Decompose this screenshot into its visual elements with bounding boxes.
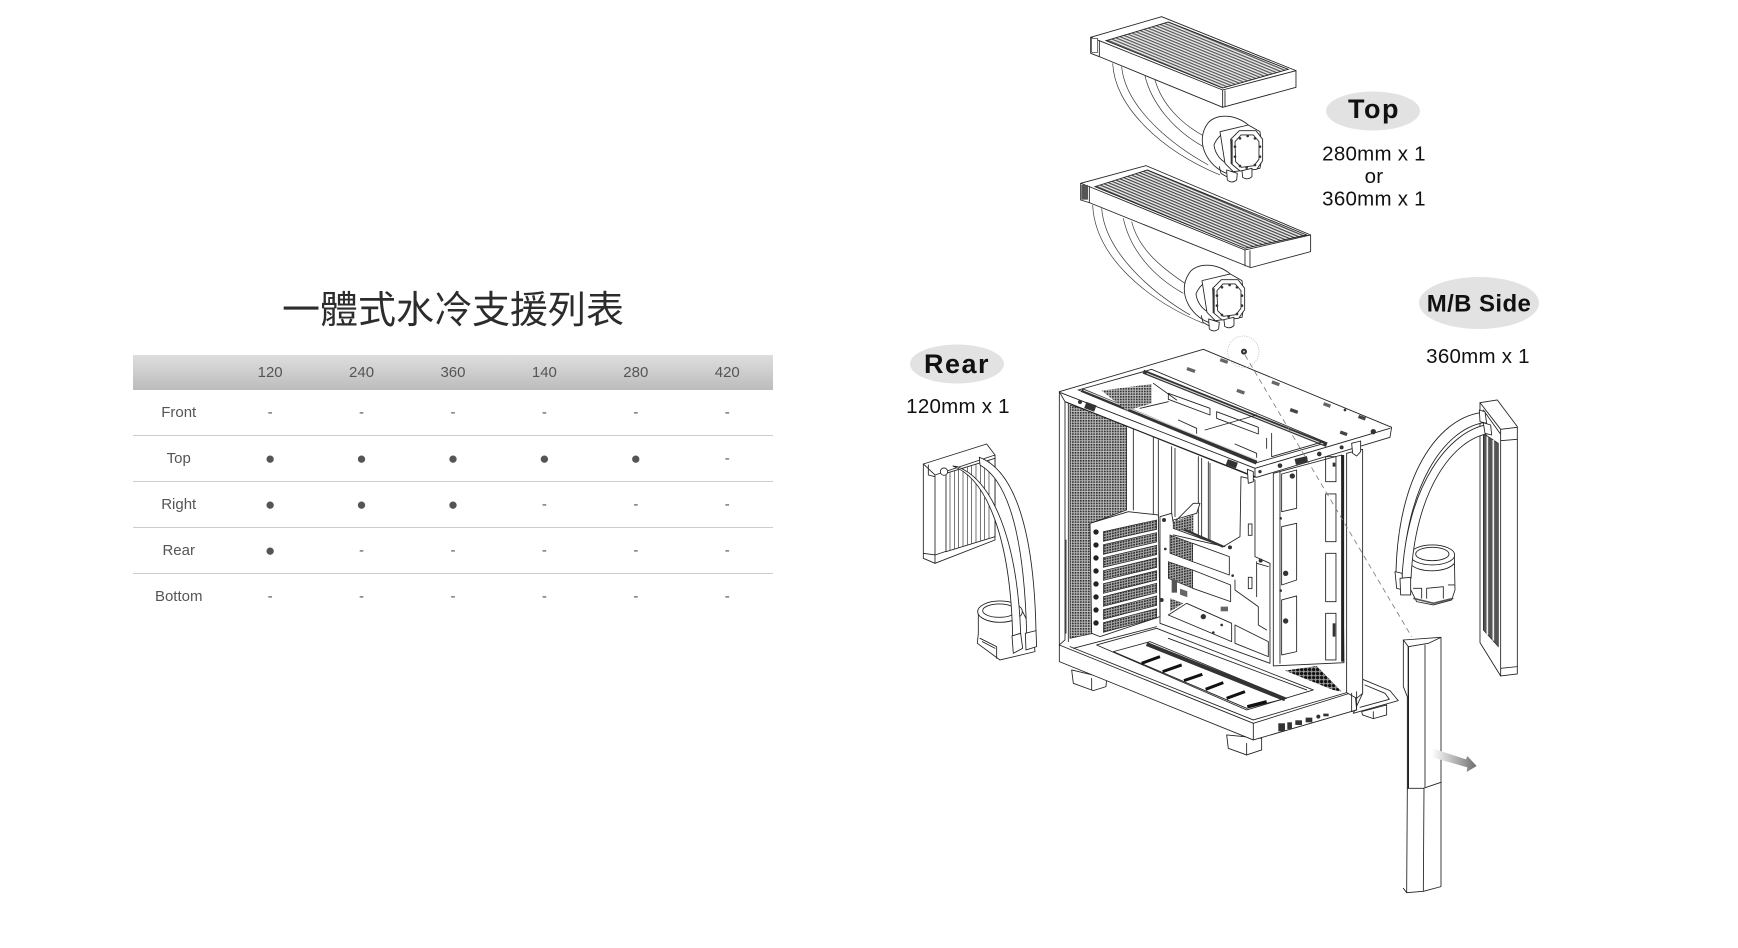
size: Rear: 120mm x 1: [906, 395, 1010, 418]
row: Right: ●: [265, 494, 275, 514]
heading: M/B Side: M/B Side: [1427, 290, 1531, 318]
table header row: 280: [623, 364, 648, 381]
table header row: [133, 355, 773, 390]
table header row: 140: [532, 364, 557, 381]
row: Rear: -: [450, 542, 455, 558]
right pillar: [1343, 449, 1363, 712]
case: [1059, 336, 1412, 755]
sizes: Top: 360mm x 1: [1322, 188, 1426, 210]
radiator M/B side: [1480, 400, 1517, 676]
row: Top: ●: [448, 448, 458, 468]
table header row: 240: [349, 364, 374, 381]
row: Rear: -: [633, 542, 638, 558]
row: Top: ●: [265, 448, 275, 468]
row: Top: -: [725, 450, 730, 466]
row: Front: -: [450, 404, 455, 421]
row: Top: [166, 448, 730, 468]
row: Bottom: -: [542, 588, 547, 605]
row: Rear: Rear: [162, 542, 195, 558]
table header row: 120: [258, 364, 283, 381]
row: Right: ●: [448, 494, 458, 514]
row: Top: ●: [539, 448, 550, 468]
row: Front: -: [359, 404, 364, 421]
sizes: Top: or: [1365, 165, 1383, 188]
bottom fan bay: [1097, 628, 1313, 710]
top radiators group: [1081, 17, 1311, 331]
row: Bottom: Bottom: [155, 588, 202, 605]
table header row: 360: [440, 364, 465, 381]
row: Top: ●: [631, 448, 641, 468]
row: Right: ●: [356, 494, 367, 514]
dashed guide line and screw: [1228, 336, 1412, 637]
tubes 120: [953, 457, 1037, 653]
left front pillar and mesh: [1059, 392, 1158, 645]
row: Rear: -: [725, 542, 730, 558]
row: Front: -: [542, 404, 547, 421]
row: Rear: -: [542, 542, 547, 558]
label: Top: [1322, 92, 1426, 210]
row: Right: Right: [161, 496, 196, 512]
row: Bottom: -: [268, 588, 273, 605]
base: [1059, 627, 1357, 740]
360mm radiator with tubes and pump: [1081, 166, 1311, 331]
cable management panel: [1273, 455, 1344, 666]
sizes: Top: [1322, 142, 1426, 210]
row: Right: -: [633, 496, 638, 512]
pump 120: [977, 601, 1035, 660]
tubes M/B side: [1395, 410, 1492, 595]
top plate and frame: [1059, 349, 1392, 483]
title: 一體式水冷支援列表: [282, 290, 624, 332]
support table: [133, 355, 773, 605]
row: Top: Top: [167, 450, 191, 466]
row: Front: -: [725, 404, 730, 421]
row: Bottom: -: [359, 588, 364, 605]
radiator 120: [923, 444, 995, 563]
radiator 280 body: [1091, 17, 1296, 107]
label: Rear: [906, 344, 1010, 418]
pump M/B side: [1410, 545, 1455, 605]
tubes 360: [1093, 205, 1203, 323]
ellipse: M/B Side: [1419, 277, 1539, 329]
PCI slots: [1090, 512, 1160, 637]
sizes: Top: 280mm x 1: [1322, 142, 1426, 166]
ellipse: Top: [1326, 92, 1420, 130]
pump 360: [1184, 265, 1245, 331]
row: Bottom: -: [450, 588, 455, 605]
rear 120mm radiator with tubes and pump: [923, 444, 1037, 660]
ellipse: Rear: [910, 344, 1004, 384]
row: Top: ●: [356, 448, 367, 468]
removable front column panel: [1403, 637, 1477, 893]
label: M/B Side: [1419, 277, 1539, 368]
cables: [1285, 666, 1342, 692]
column panel: [1403, 637, 1441, 893]
arrow: [1432, 749, 1477, 772]
row: Front: -: [268, 404, 273, 421]
heading: Rear: Rear: [924, 349, 990, 379]
row: Right: [161, 494, 730, 514]
M/B side 360mm radiator with tubes and pump: [1395, 400, 1517, 676]
right base extension: [1353, 679, 1398, 713]
table header row: 420: [715, 364, 740, 381]
radiator 360 body: [1081, 166, 1311, 268]
row: Bottom: [155, 588, 730, 605]
row: Bottom: -: [725, 588, 730, 605]
280mm radiator with tubes and pump: [1091, 17, 1296, 182]
row: Right: -: [725, 496, 730, 512]
pump 280: [1202, 116, 1263, 182]
tubes 280: [1113, 63, 1220, 175]
feet: [1072, 670, 1387, 755]
front I/O: [1278, 714, 1329, 731]
heading: Top: Top: [1348, 94, 1400, 124]
row: Rear: ●: [265, 540, 275, 560]
size: M/B Side: 360mm x 1: [1426, 345, 1530, 368]
row: Front: -: [633, 404, 638, 421]
row: Front: [161, 404, 730, 421]
row: Front: Front: [161, 404, 196, 421]
motherboard tray: [1160, 447, 1270, 663]
row: Rear: -: [359, 542, 364, 558]
row: Bottom: -: [633, 588, 638, 605]
row: Rear: [162, 540, 730, 560]
row: Right: -: [542, 496, 547, 512]
